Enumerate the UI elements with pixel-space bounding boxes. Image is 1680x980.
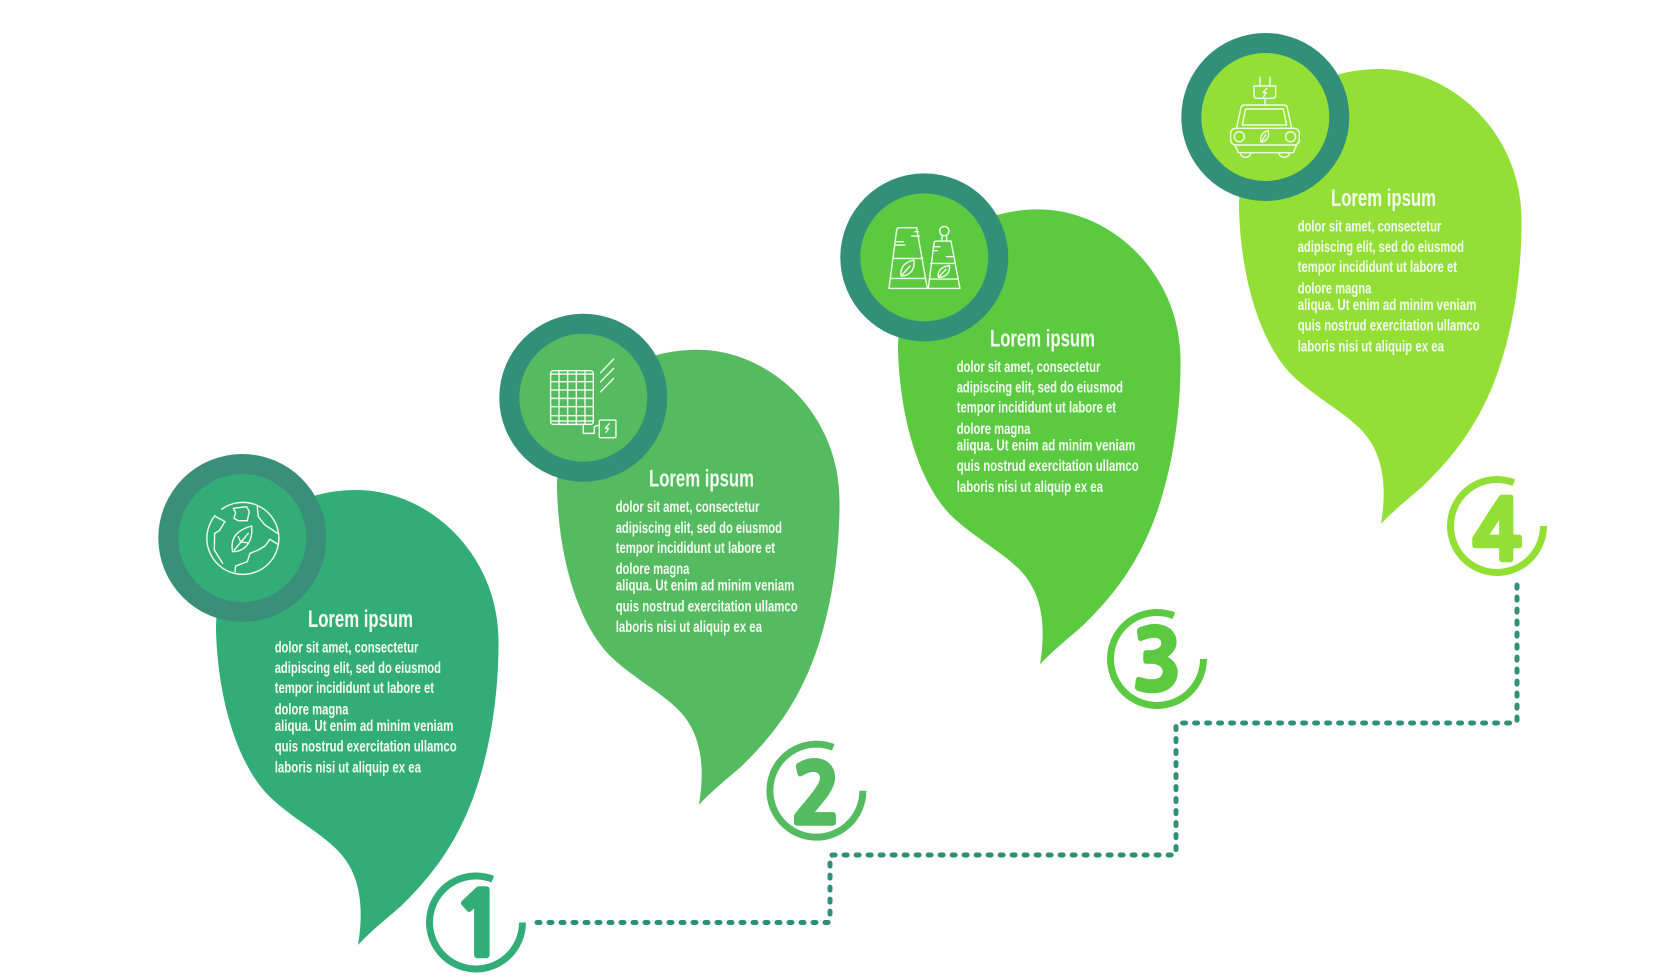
text block: step 3: dolor sit amet, consectetur: [957, 359, 1100, 376]
panel: step 4: [1181, 33, 1544, 572]
text block: step 3: dolore magna: [957, 421, 1030, 438]
text block: step 2: tempor incididunt ut labore et: [616, 540, 775, 557]
icon: cooling towers with leaves: [889, 226, 960, 288]
icon badge: step 4: [1181, 33, 1349, 201]
callout shape: step 4: [1239, 69, 1522, 524]
text block: step 1: quis nostrud exercitation ullamco: [275, 739, 457, 756]
text block: step 1: [275, 640, 457, 776]
text block: step 3: [957, 359, 1139, 496]
text block: step 2: adipiscing elit, sed do eiusmod: [616, 520, 782, 537]
text block: step 3: tempor incididunt ut labore et: [957, 400, 1116, 417]
text block: step 2: aliqua. Ut enim ad minim veniam: [616, 578, 794, 595]
text block: step 1: laboris nisi ut aliquip ex ea: [275, 759, 421, 776]
text block: step 2: dolor sit amet, consectetur: [616, 499, 759, 516]
icon: electric car with plug: [1231, 77, 1299, 157]
text block: step 4: aliqua. Ut enim ad minim veniam: [1298, 297, 1476, 314]
number badge: step 1: 1: [453, 881, 507, 969]
heading: step 2: Lorem ipsum: [649, 466, 754, 493]
text block: step 1: tempor incididunt ut labore et: [275, 680, 434, 697]
text block: step 2: quis nostrud exercitation ullamco: [616, 598, 798, 615]
icon badge: step 2: [499, 314, 667, 482]
text block: step 1: adipiscing elit, sed do eiusmod: [275, 660, 441, 677]
heading: step 1: Lorem ipsum: [308, 606, 413, 633]
heading: step 3: Lorem ipsum: [990, 325, 1095, 352]
text block: step 3: adipiscing elit, sed do eiusmod: [957, 380, 1123, 397]
text block: step 1: dolore magna: [275, 702, 348, 718]
callout shape: step 1: [216, 490, 499, 945]
number badge: step 3: [1110, 612, 1204, 705]
number badge: step 2: 2: [792, 754, 841, 836]
text block: step 4: [1298, 218, 1480, 355]
text block: step 3: laboris nisi ut aliquip ex ea: [957, 479, 1103, 496]
text block: step 1: aliqua. Ut enim ad minim veniam: [275, 718, 453, 735]
callout shape: step 3: [898, 209, 1181, 664]
icon badge: step 3: [840, 173, 1008, 341]
number badge: step 1: [430, 876, 522, 969]
text block: step 4: laboris nisi ut aliquip ex ea: [1298, 338, 1444, 355]
number badge: step 4: [1450, 479, 1544, 572]
number badge: step 3: 3: [1132, 620, 1182, 702]
text block: step 4: dolore magna: [1298, 280, 1371, 298]
text block: step 4: dolor sit amet, consectetur: [1298, 218, 1441, 236]
text block: step 4: quis nostrud exercitation ullamco: [1298, 318, 1480, 335]
text block: step 3: quis nostrud exercitation ullamco: [957, 458, 1139, 475]
panel: step 1: [158, 454, 523, 969]
number badge: step 4: 4: [1472, 490, 1522, 572]
panel: step 3: [840, 173, 1204, 705]
text block: step 2: [616, 499, 798, 636]
heading: step 4: Lorem ipsum: [1331, 185, 1436, 212]
number badge: step 2: [770, 744, 863, 837]
text block: step 3: aliqua. Ut enim ad minim veniam: [957, 437, 1135, 454]
text block: step 2: dolore magna: [616, 561, 689, 578]
icon: solar panel: [551, 359, 616, 438]
text block: step 1: dolor sit amet, consectetur: [275, 640, 418, 656]
connector: dotted staircase line from step 1 to step 4: [537, 584, 1517, 922]
panel: step 2: [499, 314, 863, 837]
text block: step 2: laboris nisi ut aliquip ex ea: [616, 619, 762, 636]
text block: step 4: tempor incididunt ut labore et: [1298, 259, 1457, 276]
icon badge: step 1: [158, 454, 326, 622]
text block: step 4: adipiscing elit, sed do eiusmod: [1298, 239, 1464, 256]
callout shape: step 2: [557, 350, 840, 805]
icon: globe with leaf: [207, 502, 279, 574]
